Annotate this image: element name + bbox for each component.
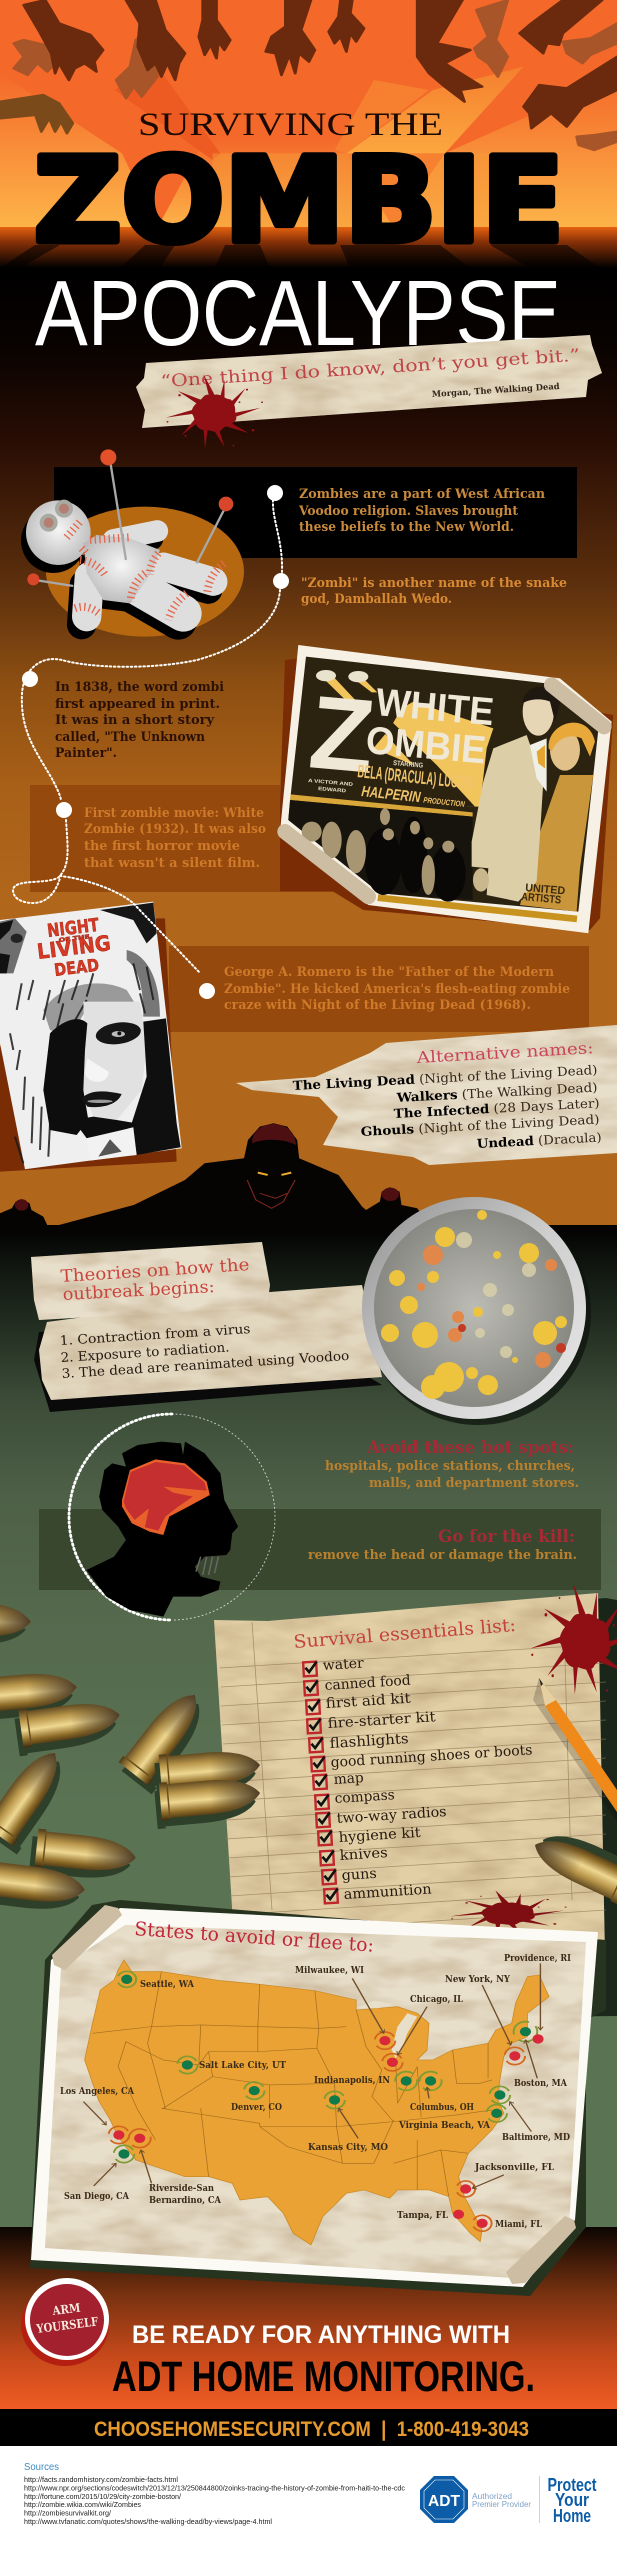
- bullet dots: [22, 485, 289, 999]
- panel: first zombie movie: [30, 785, 280, 892]
- theories list: 3. The dead are reanimated using Voodoo: [61, 1349, 350, 1382]
- text: avoid hot spots: Avoid these hot spots:: [366, 1438, 574, 1458]
- contact band: CHOOSEHOMESECURITY.COM | 1-800-419-3043: [94, 2418, 529, 2441]
- panel: Romero band: [169, 946, 589, 1032]
- text: George Romero: craze with Night of the Living Dead (1968).: [224, 998, 531, 1013]
- text: go for the kill: [308, 1527, 577, 1563]
- icon: zombie head with brain: [69, 1414, 275, 1620]
- item: hygiene kit: hygiene kit: [338, 1825, 421, 1846]
- item: water: [303, 1655, 364, 1676]
- city labels: Riverside-San: [149, 2184, 214, 2194]
- logo: Protect Your Home: Home: [553, 2506, 591, 2526]
- logo: Protect Your Home: Your: [555, 2490, 589, 2510]
- blood splatter: checklist top right: [531, 1583, 617, 1695]
- city labels: San Diego, CA: [64, 2192, 130, 2202]
- text: word zombi 1838: [55, 680, 224, 761]
- icon: pencil: [533, 1678, 617, 1822]
- contact band: [0, 2409, 617, 2446]
- poster title: Z: [305, 674, 379, 795]
- heading: Survival essentials list:: [293, 1615, 517, 1653]
- poster title: [36, 915, 112, 981]
- badge: arm yourself: [21, 2278, 109, 2366]
- sources list: http://fortune.com/2015/10/29/city-zombie-boston/: [24, 2494, 181, 2501]
- poster credits: ARTISTS: [521, 891, 562, 906]
- text: snake god: [301, 576, 567, 607]
- poster credits: HALPERIN PRODUCTION: [361, 783, 466, 811]
- panel: theories paper: outbreak begins:: [62, 1277, 215, 1305]
- text: voodoo origin: Zombies are a part of West African: [299, 487, 546, 502]
- logo: ADT authorized provider: [420, 2476, 531, 2523]
- item: guns: guns: [341, 1866, 377, 1884]
- timeline dotted line: [13, 500, 282, 973]
- item: map: [313, 1770, 364, 1789]
- panel: first zombie movie: First zombie movie: White: [84, 806, 264, 821]
- panel: first zombie movie: Zombie (1932). It was also: [84, 822, 266, 837]
- logo: Protect Your Home: [548, 2475, 597, 2526]
- item: good running shoes or boots: good running shoes or boots: [330, 1742, 533, 1771]
- item: guns: [322, 1866, 377, 1884]
- text: George Romero: George A. Romero is the "Father of the Modern: [224, 965, 555, 980]
- poster title: [305, 674, 496, 795]
- poster credits: UNITED: [525, 882, 566, 897]
- poster credits: STARRING: [393, 760, 424, 770]
- logo: ADT authorized provider: Authorized: [472, 2491, 512, 2501]
- panel: quote paper strip: [136, 335, 602, 448]
- sources list: Sources: [24, 2462, 59, 2473]
- text: go for the kill: remove the head or damage the brain.: [308, 1548, 577, 1563]
- item: compass: [315, 1787, 395, 1809]
- city labels: Bernardino, CA: [149, 2196, 222, 2206]
- poster title: LIVING: [36, 931, 112, 964]
- text: voodoo origin: Voodoo religion. Slaves brought: [298, 504, 518, 519]
- text: avoid hot spots: [325, 1438, 579, 1491]
- text: voodoo origin: [298, 487, 546, 535]
- icon: petri dish: [362, 1197, 591, 1425]
- city labels: [60, 1954, 571, 2230]
- text: snake god: god, Damballah Wedo.: [301, 592, 452, 607]
- ad headline: be ready: BE READY FOR ANYTHING WITH: [132, 2321, 510, 2349]
- text: George Romero: Zombie". He kicked America's flesh-eating zombie: [224, 982, 570, 997]
- text: word zombi 1838: It was in a short story: [55, 713, 214, 728]
- map of the United States: [83, 1960, 549, 2245]
- names list: Walkers (The Walking Dead): [395, 1079, 598, 1105]
- city labels: Jacksonville, FL: [474, 2163, 555, 2173]
- theories list: 1. Contraction from a virus: [59, 1322, 251, 1349]
- city labels: Indianapolis, IN: [314, 2076, 390, 2086]
- illustration: zombie silhouettes on horizon: [0, 1123, 617, 1233]
- blood splatter: checklist bottom: [450, 1890, 567, 1935]
- sources list: http://zombiesurvivalkit.org/: [24, 2510, 111, 2518]
- panel: go for the kill band: [39, 1509, 601, 1590]
- poster title: OF THE: [59, 934, 90, 944]
- sources list: [24, 2462, 405, 2526]
- title: Surviving the: SURVIVING THE: [138, 107, 443, 143]
- sources list: http://facts.randomhistory.com/zombie-facts.html: [24, 2477, 178, 2484]
- city labels: Columbus, OH: [410, 2103, 474, 2113]
- sources list: http://zombie.wikia.com/wiki/Zombies: [24, 2502, 141, 2509]
- poster credits: [308, 760, 566, 906]
- item: flashlights: flashlights: [329, 1731, 409, 1752]
- quote attribution: Morgan, The Walking Dead: [432, 382, 560, 400]
- item: map: map: [333, 1770, 364, 1788]
- label arrows: [83, 1963, 540, 2188]
- poster credits: A VICTOR AND: [308, 778, 354, 788]
- city labels: Boston, MA: [514, 2079, 568, 2089]
- panel: Night of the Living Dead poster: [0, 902, 182, 1172]
- sources list: http://www.tvfanatic.com/quotes/shows/the-walking-dead/by-views/page-4.html: [24, 2519, 272, 2526]
- item: first aid kit: [306, 1691, 411, 1714]
- rings around city markers: [109, 1971, 537, 2231]
- heading: Theories on how the: [60, 1255, 250, 1287]
- item: compass: compass: [334, 1787, 395, 1807]
- text: word zombi 1838: Painter".: [55, 746, 117, 761]
- item: first aid kit: first aid kit: [325, 1691, 411, 1712]
- quote text: “One thing I do know, don’t you get bit.”: [160, 346, 580, 392]
- theories list: 2. Exposure to radiation.: [60, 1340, 230, 1366]
- badge: arm yourself: ARM: [51, 2301, 81, 2318]
- item: two-way radios: two-way radios: [336, 1804, 447, 1827]
- city labels: Salt Lake City, UT: [199, 2061, 286, 2071]
- green markers: cities to flee to: [118, 1975, 531, 2159]
- logo: ADT authorized provider: ADT: [428, 2493, 460, 2510]
- item: knives: [320, 1845, 388, 1865]
- city labels: Providence, RI: [504, 1954, 571, 1964]
- panel: first zombie movie: the first horror movie: [84, 839, 240, 854]
- text: avoid hot spots: malls, and department stores.: [369, 1476, 579, 1491]
- red markers: cities to avoid: [113, 2034, 544, 2228]
- checklist items: [303, 1655, 533, 1903]
- city labels: New York, NY: [445, 1975, 511, 1985]
- poster title: NIGHT: [46, 915, 101, 942]
- text: George Romero: [224, 965, 570, 1013]
- panel: alternative names paper: [236, 1025, 617, 1165]
- names list: [292, 1062, 602, 1151]
- divider: [539, 2476, 540, 2523]
- poster credits: BELA (DRACULA) LUGOSI: [357, 761, 475, 793]
- city labels: Milwaukee, WI: [295, 1966, 364, 1976]
- city labels: Seattle, WA: [140, 1980, 195, 1990]
- names list: Ghouls (Night of the Living Dead): [360, 1112, 600, 1139]
- badge: arm yourself: YOURSELF: [35, 2314, 99, 2336]
- logo: Protect Your Home: Protect: [548, 2475, 597, 2495]
- panel: first zombie movie: that wasn't a silent film.: [84, 856, 260, 871]
- panel: survival essentials checklist paper: [214, 1593, 617, 2035]
- header artwork: orange sky, rays and hands: [0, 0, 617, 268]
- poster title: DEAD: [53, 956, 100, 981]
- icon: reaching zombie hands: [0, 0, 617, 150]
- item: canned food: canned food: [324, 1673, 411, 1694]
- panel: theories paper: [31, 1242, 382, 1412]
- footer white area: [0, 2446, 617, 2560]
- item: water: water: [322, 1655, 364, 1674]
- city labels: Los Angeles, CA: [60, 2087, 135, 2097]
- heading: Alternative names:: [415, 1038, 594, 1067]
- names list: The Living Dead (Night of the Living Dead): [292, 1062, 598, 1093]
- text: word zombi 1838: called, "The Unknown: [55, 730, 206, 745]
- text: avoid hot spots: hospitals, police stations, churches,: [325, 1459, 575, 1474]
- item: fire-starter kit: fire-starter kit: [327, 1709, 436, 1732]
- text: word zombi 1838: first appeared in print.: [55, 697, 220, 712]
- names list: Undead (Dracula): [476, 1129, 602, 1151]
- heading: States to avoid or flee to:: [134, 1918, 375, 1957]
- logo: ADT authorized provider: Premier Provider: [472, 2499, 531, 2509]
- title: Zombie: ZOMBIE: [34, 132, 564, 269]
- poster title: WHITE: [374, 681, 496, 734]
- poster title: OMBIE: [364, 719, 488, 772]
- background: green gradient: [0, 1225, 617, 2230]
- text: voodoo origin: these beliefs to the New World.: [299, 520, 514, 535]
- panel: White Zombie movie poster: [280, 645, 613, 933]
- city labels: Miami, FL: [495, 2220, 543, 2230]
- theories list: [59, 1322, 350, 1382]
- names list: The Infected (28 Days Later): [393, 1095, 600, 1121]
- item: ammunition: ammunition: [343, 1881, 432, 1903]
- background: main brown gradient: [0, 267, 617, 1225]
- background: advertisement gradient: [0, 2227, 617, 2409]
- text: word zombi 1838: In 1838, the word zombi: [55, 680, 224, 695]
- city labels: Denver, CO: [231, 2103, 282, 2113]
- city labels: Tampa, FL: [397, 2211, 449, 2221]
- text: go for the kill: Go for the kill:: [438, 1527, 575, 1547]
- city labels: Virginia Beach, VA: [398, 2121, 491, 2131]
- text: snake god: "Zombi" is another name of the snake: [301, 576, 567, 591]
- city labels: Baltimore, MD: [502, 2133, 570, 2143]
- city labels: Kansas City, MO: [308, 2143, 388, 2153]
- panel: states map poster: [30, 1900, 606, 2296]
- city labels: Chicago, IL: [410, 1995, 464, 2005]
- item: knives: knives: [339, 1845, 388, 1864]
- blood splatter: [166, 374, 263, 448]
- panel: voodoo facts black box: [54, 467, 577, 558]
- icon: scattered bullets: [0, 1598, 617, 1917]
- icon: voodoo doll: [21, 449, 244, 637]
- poster curled corners: [52, 1905, 576, 2284]
- poster credits: EDWARD: [318, 786, 347, 794]
- sources list: http://www.npr.org/sections/codeswitch/2013/12/13/250844800/zoinks-tracing-the-history-of-zombie-from-haiti-to-the-cdc: [24, 2486, 405, 2492]
- icon: light rays: [0, 67, 617, 228]
